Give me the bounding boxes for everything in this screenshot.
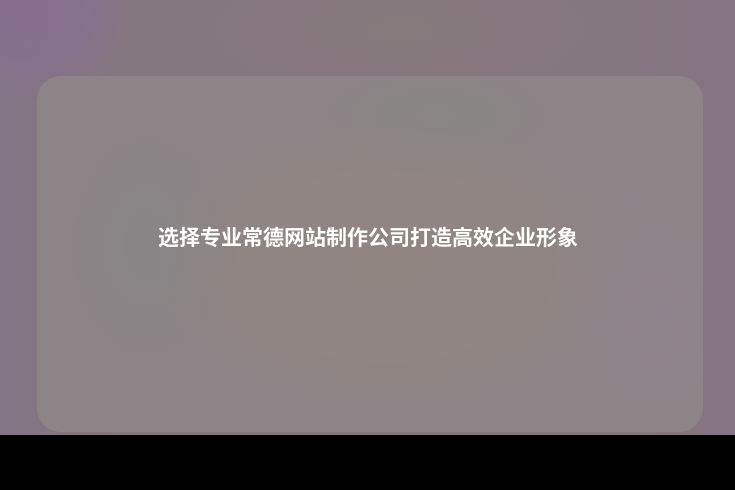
panel: translucent rounded card [37,76,703,432]
title: 选择专业常德网站制作公司打造高效企业形象 [158,227,578,250]
